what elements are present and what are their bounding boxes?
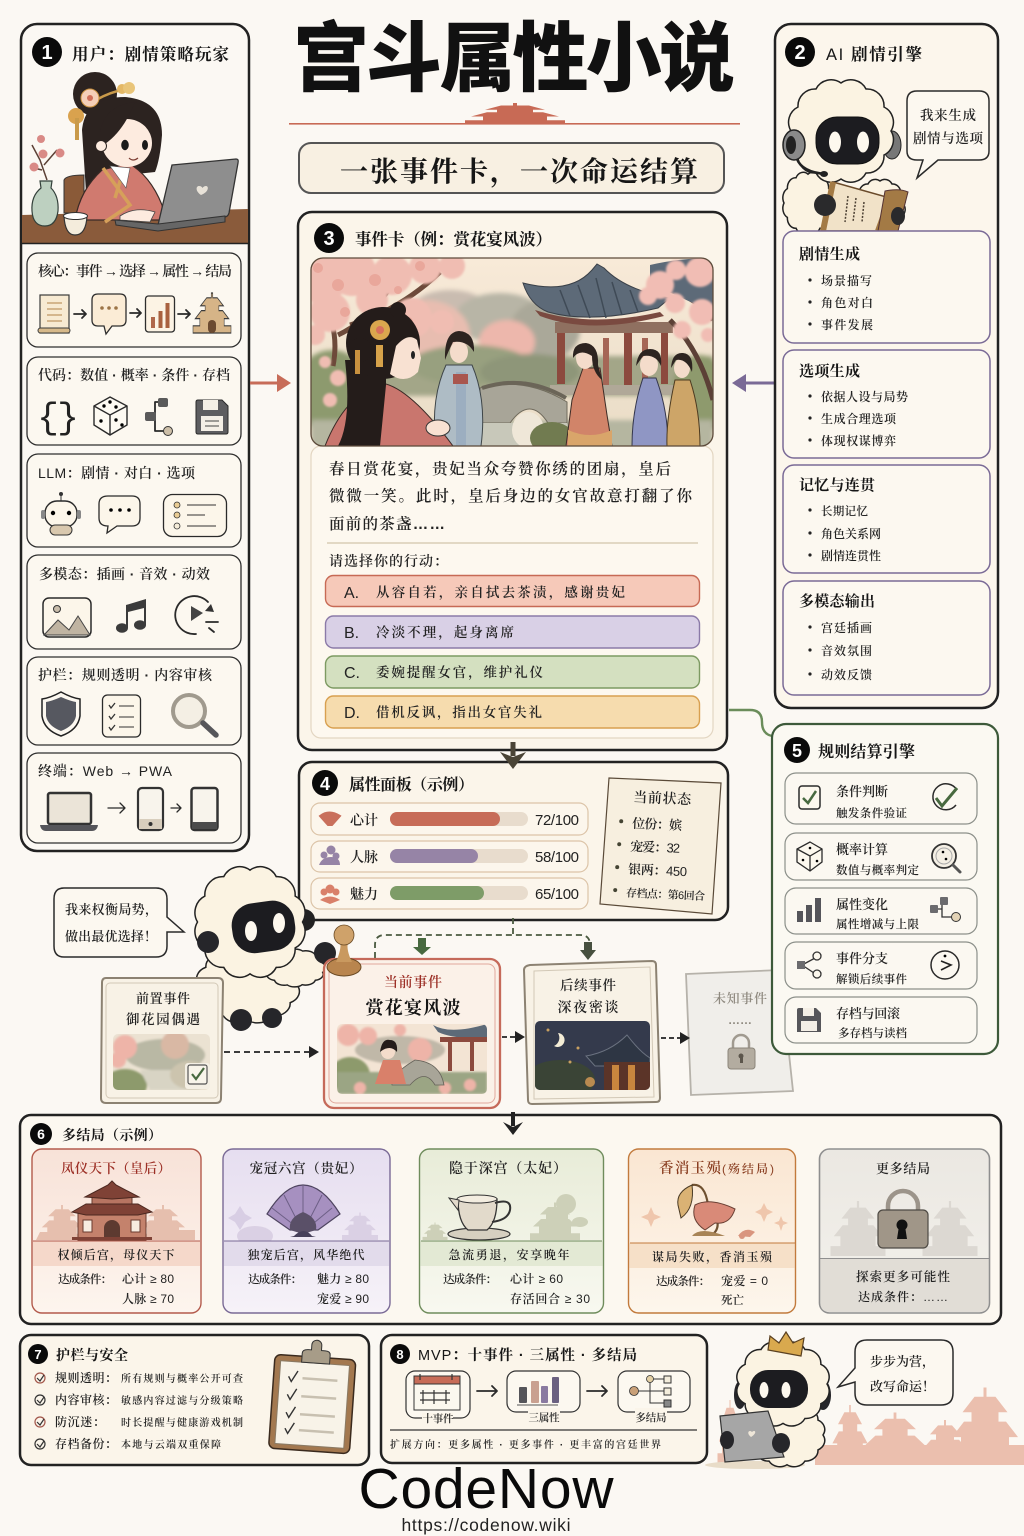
badge 1: 1 xyxy=(41,42,53,64)
ending card: dowager: 急流勇退，安享晚年 xyxy=(448,1247,570,1262)
option A: A. xyxy=(344,585,359,602)
rule: condition: 触发条件验证 xyxy=(836,806,908,820)
ending card: favored consort: 宠爱 ≥ 90 xyxy=(317,1291,369,1306)
badge 7: 7 xyxy=(34,1347,42,1362)
option D: 借机反讽，指出女官失礼 xyxy=(376,704,542,721)
option C xyxy=(326,656,700,688)
row: connections: 58/100 xyxy=(535,849,579,866)
icon: option list xyxy=(164,494,226,536)
ending card: tragic xyxy=(628,1149,796,1313)
illustration: palace xyxy=(36,1181,195,1240)
illustration: teacup xyxy=(422,1194,588,1240)
arrow: engine to event card xyxy=(732,374,774,392)
icon: robot xyxy=(41,492,81,535)
step: ten events: 十事件 xyxy=(422,1412,454,1425)
ending card: empress: 人脉 ≥ 70 xyxy=(122,1291,174,1306)
icon: speech bubble xyxy=(92,294,126,334)
ending card: dowager: 心计 ≥ 60 xyxy=(510,1271,563,1286)
icon: circular path xyxy=(931,951,959,979)
rule: attribute change xyxy=(785,888,977,934)
panel 7: guardrails and safety xyxy=(20,1335,369,1465)
box: multimodal output: 音效氛围 xyxy=(821,643,872,658)
box: option generation: 选项生成 xyxy=(799,362,860,380)
panel 4: attribute panel xyxy=(299,762,728,920)
icon: shield xyxy=(42,692,80,736)
illustration: fan xyxy=(228,1185,378,1246)
card: next event: 后续事件 xyxy=(560,977,616,993)
panel 1 heading: 用户：剧情策略玩家 xyxy=(72,44,229,64)
icon: floppy xyxy=(797,1008,821,1032)
badge 2 xyxy=(785,37,815,67)
badge 3: 3 xyxy=(323,228,335,250)
box: multimodal output: 宫廷插画 xyxy=(821,620,872,635)
thumbnail: blossom feast xyxy=(330,1024,487,1094)
ending card: empress xyxy=(32,1149,201,1313)
arrow: into endings xyxy=(503,1112,523,1135)
speech bubble: generate: 我来生成 xyxy=(920,107,976,123)
sub-panel: multimodal: 多模态：插画 · 音效 · 动效 xyxy=(39,566,210,582)
row: connections: 人脉 xyxy=(350,849,378,865)
sub-panel: guardrails xyxy=(27,657,241,745)
note: current status: 银两：450 xyxy=(628,862,687,879)
speech bubble: generate xyxy=(907,91,989,178)
sub-panel: terminals: 终端：Web → PWA xyxy=(38,763,173,779)
rule: save and rollback: 存档与回滚 xyxy=(836,1006,900,1021)
badge 5 xyxy=(784,737,810,763)
panel 3: event card xyxy=(294,212,728,750)
note: current status: 当前状态 xyxy=(633,789,693,807)
panel 8: MVP xyxy=(381,1335,707,1463)
row: scheming: 心计 xyxy=(350,812,378,828)
rule: save and rollback xyxy=(785,997,977,1043)
icon: chess pawn xyxy=(327,925,361,976)
ending card: more: 更多结局 xyxy=(876,1161,930,1176)
note: current status: 存档点：第6回合 xyxy=(626,886,705,903)
subtitle banner: 一张事件卡，一次命运结算 xyxy=(340,156,698,188)
rule list: 敏感内容过滤与分级策略 xyxy=(121,1394,243,1407)
expansion note: 扩展方向：更多属性 · 更多事件 · 更丰富的宫廷世界 xyxy=(390,1438,661,1451)
note: current status: 宠爱：32 xyxy=(630,839,680,856)
inner parchment border xyxy=(311,446,713,738)
ending card: favored consort: 宠冠六宫（贵妃） xyxy=(250,1160,362,1176)
rule list xyxy=(35,1370,243,1451)
url: https://codenow.wiki xyxy=(402,1515,570,1535)
arrow: event card to attributes xyxy=(500,742,526,769)
card: next event: 深夜密谈 xyxy=(558,999,618,1015)
ending card: favored consort xyxy=(223,1149,390,1313)
rule list: 规则透明： xyxy=(55,1370,117,1385)
rule: event branch xyxy=(785,942,977,989)
panel 1: user xyxy=(21,24,249,851)
icon: dice xyxy=(797,842,822,871)
box: multimodal output: 动效反馈 xyxy=(821,667,872,682)
ending summary area xyxy=(820,1258,988,1312)
lady 4 xyxy=(632,378,668,446)
blossom tree right xyxy=(670,290,713,400)
icon: people xyxy=(319,846,340,865)
box: multimodal output: 多模态输出 xyxy=(799,592,875,610)
ending card: dowager: 存活回合 ≥ 30 xyxy=(510,1291,590,1306)
card: previous event: 前置事件 xyxy=(136,991,190,1006)
panel 6 heading: 多结局（示例） xyxy=(62,1127,162,1143)
speech bubble: generate: 剧情与选项 xyxy=(913,130,984,146)
ending card: dowager: 达成条件： xyxy=(443,1272,497,1286)
rule: attribute change: 属性变化 xyxy=(836,897,888,912)
panel 5 heading: 规则结算引擎 xyxy=(818,742,915,761)
card: previous event: 御花园偶遇 xyxy=(126,1011,200,1027)
lady foreground xyxy=(325,383,453,446)
sub-panel: core: 核心：事件 → 选择 → 属性 → 结局 xyxy=(38,263,232,279)
box: option generation: 体现权谋博弈 xyxy=(821,433,897,448)
story text xyxy=(329,459,693,533)
icon: flow branch xyxy=(145,398,172,436)
lady 5 xyxy=(667,380,700,446)
bridge and water xyxy=(480,384,567,423)
speech bubble: step by step xyxy=(838,1340,953,1405)
icon: palace xyxy=(193,293,231,333)
panel 2 heading: AI 剧情引擎 xyxy=(826,44,922,64)
option C: C. xyxy=(344,665,360,682)
note: current status: 位份：嫔 xyxy=(632,816,683,833)
green connector: card to rule engine xyxy=(729,710,772,736)
ending summary strip xyxy=(420,1241,602,1266)
badge 6 xyxy=(30,1123,52,1145)
speech bubble: step by step: 步步为营， xyxy=(870,1354,935,1370)
rule list: 本地与云端双重保障 xyxy=(121,1438,221,1451)
arrow: user to event card xyxy=(250,374,291,392)
sub-panel: LLM xyxy=(27,454,241,547)
ending card: dowager xyxy=(420,1149,604,1313)
card: unknown event: 未知事件 xyxy=(713,991,767,1006)
arrow: current to next xyxy=(502,1031,525,1043)
ending card: empress: 凤仪天下（皇后） xyxy=(61,1161,171,1176)
badge 1 xyxy=(32,37,62,67)
box: story generation: 事件发展 xyxy=(821,317,873,332)
illustration: wilted flower xyxy=(641,1185,788,1239)
blossom trees left xyxy=(322,272,440,366)
card: previous event xyxy=(101,978,223,1103)
note: current status xyxy=(600,778,721,914)
badge 3 xyxy=(314,223,344,253)
box: memory: 记忆与连贯 xyxy=(799,476,877,494)
icon: check circle xyxy=(933,784,957,810)
rule: condition: 条件判断 xyxy=(836,784,888,799)
row: scheming: 72/100 xyxy=(535,812,579,829)
badge 2: 2 xyxy=(794,42,806,64)
sub-panel: guardrails: 护栏：规则透明 · 内容审核 xyxy=(38,667,213,683)
icon: bars xyxy=(797,898,821,922)
logo: CodeNow: CodeNow xyxy=(358,1457,614,1521)
icon: music note xyxy=(116,599,146,633)
ending card: empress: 心计 ≥ 80 xyxy=(122,1271,174,1286)
ending card: tragic: (殇结局) xyxy=(722,1161,774,1176)
mascot: sheep with pawn xyxy=(195,867,336,1031)
badge 4 xyxy=(312,770,338,796)
arrow: down to current event xyxy=(413,938,431,955)
lady 3 xyxy=(566,368,612,446)
panel 5: rule engine xyxy=(772,724,998,1054)
box: memory: 长期记忆 xyxy=(821,504,868,518)
box: option generation: 依据人设与局势 xyxy=(821,389,908,404)
icon: magnifier xyxy=(173,695,216,735)
row: connections xyxy=(311,841,588,872)
rule: condition xyxy=(785,773,977,824)
step: three attributes: 三属性 xyxy=(528,1411,560,1424)
speech bubble: step by step: 改写命运！ xyxy=(870,1379,935,1394)
thumbnail: imperial garden xyxy=(113,1034,210,1090)
speech bubble: balancing: 我来权衡局势， xyxy=(65,902,158,918)
icon: magnifier xyxy=(932,844,960,872)
ending card: empress: 权倾后宫，母仪天下 xyxy=(58,1247,174,1262)
badge 8: 8 xyxy=(396,1347,404,1362)
lady 2 xyxy=(434,365,483,446)
row: charm: 魅力 xyxy=(350,886,378,902)
rule: save and rollback: 多存档与读档 xyxy=(838,1026,908,1040)
panel 7 heading: 护栏与安全 xyxy=(56,1347,128,1363)
badge 6: 6 xyxy=(37,1126,45,1142)
panel 3 heading: 事件卡（例：赏花宴风波） xyxy=(355,229,552,249)
icon: flower xyxy=(320,884,340,904)
rule: probability: 数值与概率判定 xyxy=(836,863,920,877)
icon: braces: { xyxy=(37,398,59,439)
ending card: favored consort: 魅力 ≥ 80 xyxy=(317,1271,369,1286)
option C: 委婉提醒女官，维护礼仪 xyxy=(376,664,544,681)
badge 7 xyxy=(28,1344,48,1364)
rule list: 存档备份： xyxy=(55,1436,117,1451)
panel 4 heading: 属性面板（示例） xyxy=(349,775,474,794)
pavilion xyxy=(557,333,565,384)
rule: attribute change: 属性增减与上限 xyxy=(836,917,920,931)
card: current event xyxy=(324,959,500,1108)
box: memory xyxy=(783,465,990,573)
option B xyxy=(326,616,700,648)
icon: laptop xyxy=(40,793,98,831)
rule list: 时长提醒与健康游戏机制 xyxy=(121,1416,243,1429)
option D xyxy=(326,696,700,728)
icon: chat bubble xyxy=(99,496,140,533)
box: story generation xyxy=(783,231,990,343)
rule: probability: 概率计算 xyxy=(836,842,888,857)
subtitle banner xyxy=(299,143,724,193)
ending card: tragic: 宠爱 = 0 xyxy=(721,1273,768,1288)
ending card: favored consort: 达成条件： xyxy=(248,1272,302,1286)
story text: 春日赏花宴，贵妃当众夸赞你绣的团扇，皇后 xyxy=(329,459,671,478)
card: next event xyxy=(524,961,660,1104)
ending card: favored consort: 独宠后宫，风华绝代 xyxy=(248,1247,364,1262)
row: scheming xyxy=(311,803,588,835)
prompt: 请选择你的行动： xyxy=(329,553,448,569)
ending card: dowager: 隐于深宫（太妃） xyxy=(449,1160,567,1176)
sub-panel: LLM: LLM：剧情 · 对白 · 选项 xyxy=(38,465,196,481)
rule: probability xyxy=(785,833,977,880)
ending card: tragic: 谋局失败，香消玉殒 xyxy=(652,1249,773,1264)
icon: phone xyxy=(138,788,163,830)
ending summary strip xyxy=(630,1243,794,1268)
box: option generation: 生成合理选项 xyxy=(821,411,897,426)
badge 4: 4 xyxy=(320,774,330,794)
illustration: clipboard xyxy=(269,1337,357,1454)
sub-panel: core xyxy=(27,253,241,347)
panel 2: AI engine xyxy=(775,24,998,708)
icon: image xyxy=(43,598,91,637)
box: story generation: 场景描写 xyxy=(821,273,872,288)
icon: branch xyxy=(797,952,821,978)
rule list: 所有规则与概率公开可查 xyxy=(121,1372,243,1385)
badge 5: 5 xyxy=(792,741,802,761)
icon: fan xyxy=(320,812,340,825)
story text: 微微一笑。此时，皇后身边的女官故意打翻了你 xyxy=(329,486,693,505)
ending card: more xyxy=(820,1149,990,1313)
step: multiple endings xyxy=(618,1371,690,1424)
icon: floppy disk xyxy=(196,400,228,434)
box: multimodal output xyxy=(783,581,990,695)
box: memory: 剧情连贯性 xyxy=(821,548,881,563)
rule list: 防沉迷： xyxy=(55,1414,105,1429)
icon: checklist xyxy=(102,695,140,737)
rule list: 内容审核： xyxy=(55,1392,117,1407)
sub-panel: terminals xyxy=(27,753,241,843)
sub-panel: code: 代码：数值 · 概率 · 条件 · 存档 xyxy=(38,367,230,383)
step: multiple endings: 多结局 xyxy=(636,1411,666,1424)
speech bubble: balancing: 做出最优选择！ xyxy=(65,929,157,944)
rule: event branch: 事件分支 xyxy=(836,951,888,966)
card: current event: 赏花宴风波 xyxy=(366,997,460,1018)
ending summary strip xyxy=(33,1241,200,1266)
card: unknown event xyxy=(686,970,793,1095)
panel 8 heading: MVP：十事件 · 三属性 · 多结局 xyxy=(418,1346,637,1364)
option A: 从容自若，亲自拭去茶渍，感谢贵妃 xyxy=(376,584,626,601)
box: memory: 角色关系网 xyxy=(821,526,881,541)
badge 8 xyxy=(390,1344,410,1364)
icon: checkbox xyxy=(799,786,820,809)
icon: tablet xyxy=(192,788,218,830)
title ornament: palace divider xyxy=(289,103,740,125)
icon: flow xyxy=(930,897,960,922)
icon: bar chart xyxy=(146,296,174,332)
icon: braces xyxy=(37,398,79,439)
arrow: previous to current xyxy=(224,1046,319,1058)
arrow: next to unknown xyxy=(661,1032,690,1044)
background: pink palace silhouette xyxy=(718,1388,1024,1465)
row: charm: 65/100 xyxy=(535,886,579,903)
sub-panel: code xyxy=(27,357,241,445)
box: option generation xyxy=(783,350,990,458)
step: ten events xyxy=(406,1371,470,1425)
ending card: tragic: 死亡 xyxy=(721,1293,744,1307)
illustration: sheep with scroll xyxy=(783,80,908,234)
rule: event branch: 解锁后续事件 xyxy=(836,972,908,986)
ending card: empress: 达成条件： xyxy=(58,1272,112,1286)
row: charm xyxy=(311,878,588,909)
icon: play cycle xyxy=(175,596,218,634)
sub-panel: multimodal xyxy=(27,555,241,649)
icon: scroll xyxy=(38,295,70,333)
ending summary strip xyxy=(224,1241,389,1266)
title: 宫斗属性小说 xyxy=(293,0,735,107)
arrows: dashed branch from attributes to events xyxy=(375,918,590,958)
option D: D. xyxy=(344,705,360,722)
box: story generation: 剧情生成 xyxy=(799,245,860,263)
thumbnail: night talk xyxy=(535,1021,650,1090)
panel 6: multiple endings xyxy=(20,1115,1001,1324)
card: unknown event: …… xyxy=(728,1013,752,1027)
story text: 面前的茶盏…… xyxy=(329,514,445,533)
ending card: more: 探索更多可能性 xyxy=(856,1269,950,1284)
illustration: girl at laptop xyxy=(21,72,249,243)
icon: braces: } xyxy=(57,398,79,439)
icon: completed check xyxy=(185,1063,210,1089)
ending card: tragic: 达成条件： xyxy=(656,1274,710,1288)
ending card: tragic: 香消玉殒 xyxy=(659,1159,722,1177)
option A xyxy=(326,576,700,606)
mascot: crowned sheep with laptop xyxy=(705,1332,831,1469)
step: three attributes xyxy=(507,1371,580,1424)
card: current event: 当前事件 xyxy=(384,974,442,990)
option B: B. xyxy=(344,625,359,642)
arrow: down to next event xyxy=(580,942,596,960)
ending card: more: 达成条件：…… xyxy=(858,1289,948,1304)
illustration: blossom garden scene xyxy=(312,258,712,446)
option B: 冷淡不理，起身离席 xyxy=(376,624,514,641)
illustration: lock xyxy=(830,1191,978,1256)
icon: dice xyxy=(94,397,127,435)
box: story generation: 角色对白 xyxy=(821,295,873,310)
speech bubble: balancing xyxy=(54,888,184,957)
